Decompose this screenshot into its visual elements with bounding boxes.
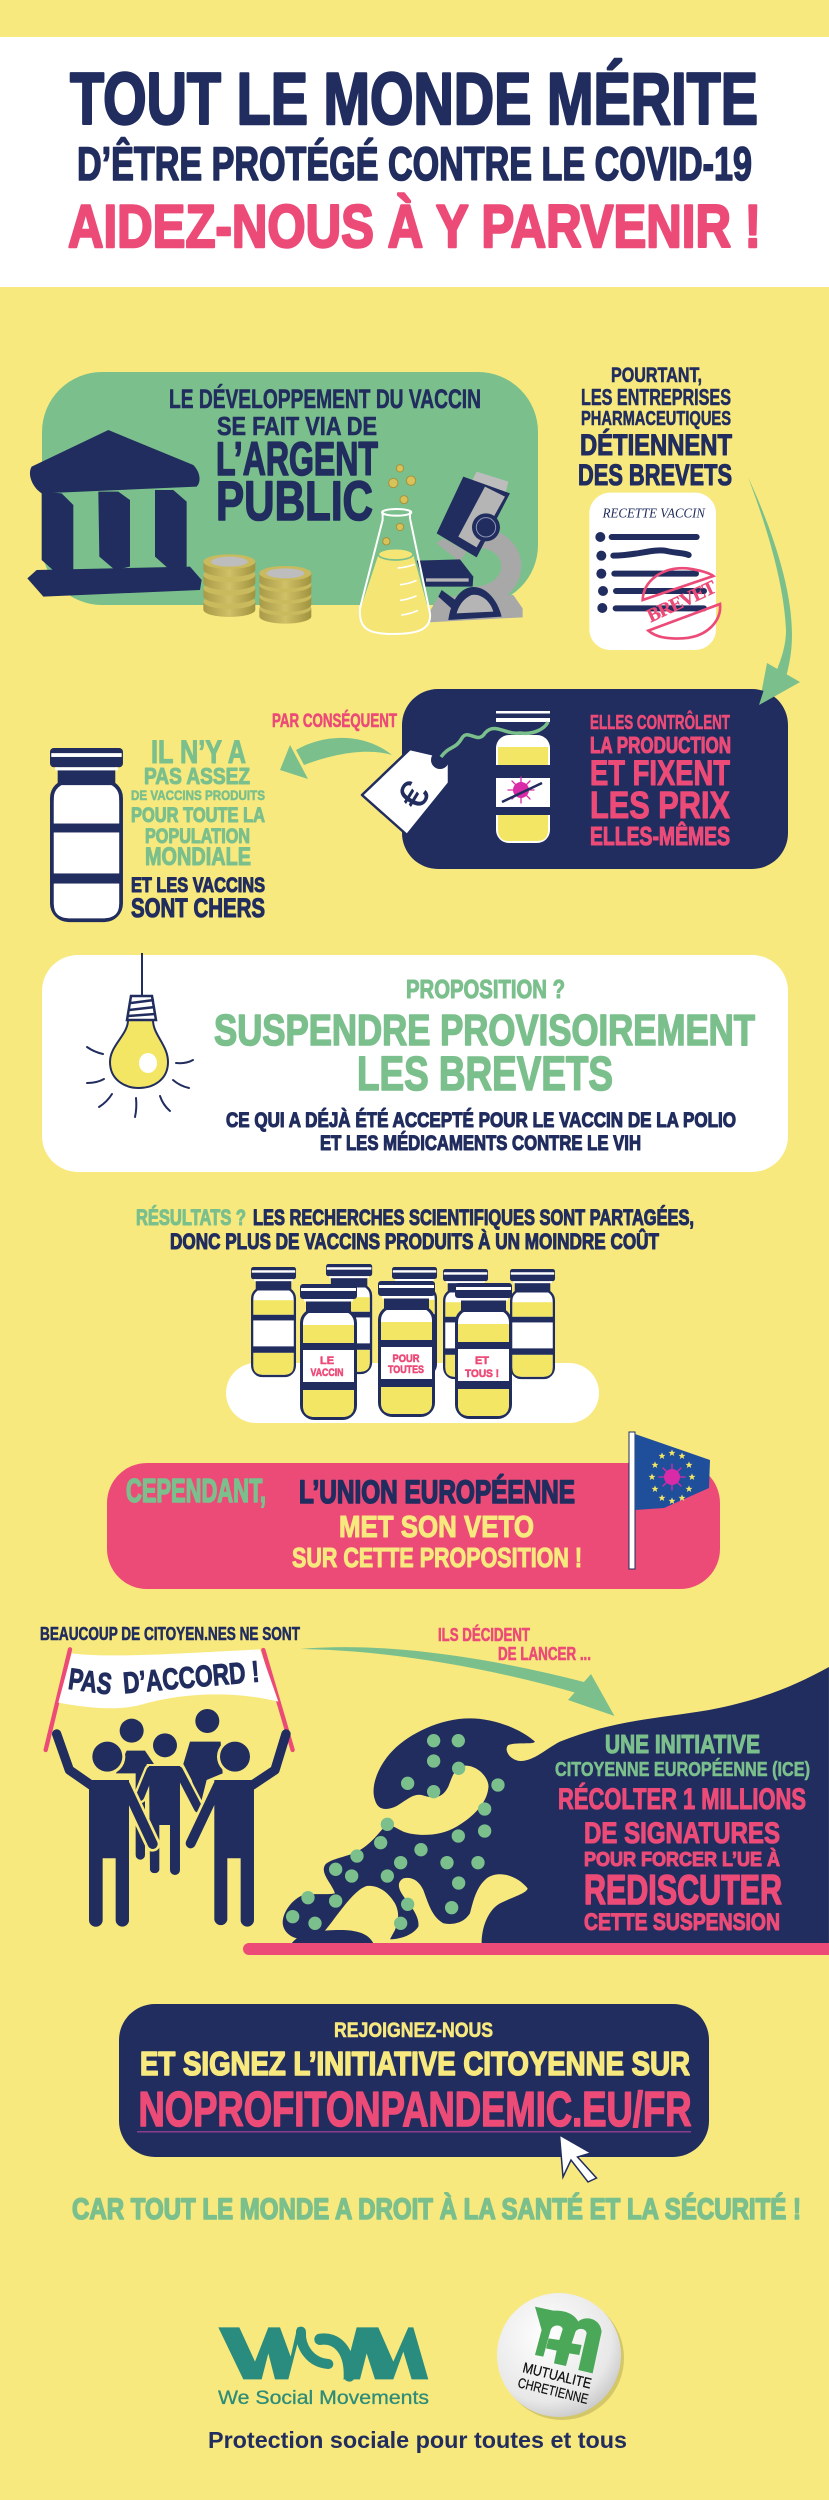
text: not enough vaccines: POUR TOUTE LA xyxy=(131,804,265,827)
text: companies hold patents: LES ENTREPRISES xyxy=(581,384,731,410)
text: they decide to launch: ILS DÉCIDENT xyxy=(438,1624,530,1645)
text: results: RÉSULTATS ? xyxy=(136,1205,246,1230)
initiative text: DE SIGNATURES xyxy=(584,1817,780,1850)
veto text: CEPENDANT, xyxy=(126,1472,266,1509)
panel: proposal xyxy=(42,953,788,1172)
text: not enough vaccines: IL N’Y A xyxy=(151,734,246,770)
icon: bank building xyxy=(27,430,202,597)
icon: mouse cursor xyxy=(560,2135,596,2182)
vial labels: TOUS ! xyxy=(465,1368,499,1380)
control text: LES PRIX xyxy=(590,785,731,827)
veto text xyxy=(126,1472,582,1573)
tagline: Protection sociale pour toutes et tous xyxy=(208,2427,627,2453)
icon: vaccine recipe card with patent stamp xyxy=(589,493,720,650)
icon: vial in panel xyxy=(496,711,550,843)
icon: EU flag xyxy=(629,1432,710,1569)
initiative text: UNE INITIATIVE xyxy=(605,1729,760,1759)
text: not enough vaccines: PAS ASSEZ xyxy=(144,763,250,789)
veto text: MET SON VETO xyxy=(339,1509,534,1544)
vial labels: VACCIN xyxy=(310,1367,344,1379)
vial labels: POUR xyxy=(392,1353,420,1365)
control text xyxy=(590,710,731,851)
icon: price tag: € xyxy=(389,775,438,817)
vial labels: LE xyxy=(320,1355,334,1367)
text: not enough vaccines: POPULATION xyxy=(145,825,250,848)
arrow: patents to control xyxy=(748,477,800,705)
text: companies hold patents: POURTANT, xyxy=(611,364,702,387)
wave dots xyxy=(286,1734,505,1930)
banner xyxy=(58,1649,278,1708)
logo: WSM xyxy=(218,2327,429,2409)
public money text: PUBLIC xyxy=(216,469,373,532)
text: results: DONC PLUS DE VACCINS PRODUITS À UN MOINDRE COÛT xyxy=(170,1229,659,1254)
public money text: LE DÉVELOPPEMENT DU VACCIN xyxy=(169,383,481,414)
back figures xyxy=(116,1709,223,1860)
vial labels: ET xyxy=(475,1355,489,1367)
text: companies hold patents xyxy=(578,364,732,492)
protesters with banner xyxy=(46,1649,293,1927)
group of vials on white pill xyxy=(226,1264,599,1423)
proposal text xyxy=(214,974,755,1155)
arrow head overlay on panel xyxy=(759,680,800,705)
proposal text: LES BREVETS xyxy=(357,1048,613,1101)
vial labels xyxy=(310,1353,499,1380)
logo: Mutualité Chrétienne button xyxy=(497,2293,624,2420)
icon: price tag xyxy=(362,722,548,835)
initiative text: POUR FORCER L’UE À xyxy=(584,1848,780,1871)
text: companies hold patents: DÉTIENNENT xyxy=(580,428,732,462)
icon: vaccine recipe card with patent stamp: BREVET xyxy=(644,577,720,627)
front right figure xyxy=(191,1734,286,1927)
logo: Mutualité Chrétienne button: CHRETIENNE xyxy=(516,2374,590,2407)
text: not enough vaccines: MONDIALE xyxy=(145,843,251,871)
title band xyxy=(0,37,829,287)
text: results: LES RECHERCHES SCIENTIFIQUES SONT PARTAGÉES, xyxy=(253,1205,694,1230)
text: citizens disagree: BEAUCOUP DE CITOYEN.NES NE SONT xyxy=(40,1623,301,1644)
panel: public money xyxy=(27,372,538,634)
vial labels: TOUTES xyxy=(388,1364,424,1376)
veto text: L’UNION EUROPÉENNE xyxy=(299,1474,575,1510)
text: companies hold patents: PHARMACEUTIQUES xyxy=(581,408,731,430)
text: companies hold patents: DES BREVETS xyxy=(578,459,732,492)
initiative text: CETTE SUSPENSION xyxy=(584,1909,780,1936)
text: they decide to launch xyxy=(438,1624,591,1664)
public money text: L’ARGENT xyxy=(216,432,378,485)
panel: call to action xyxy=(119,2004,709,2157)
proposal text: ET LES MÉDICAMENTS CONTRE LE VIH xyxy=(320,1132,641,1155)
label: par conséquent: PAR CONSÉQUENT xyxy=(272,710,397,732)
centre figure xyxy=(140,1733,198,1875)
text: they decide to launch: DE LANCER ... xyxy=(498,1644,591,1664)
panel: EU veto xyxy=(107,1432,720,1589)
wave illustration xyxy=(243,1667,829,1955)
icon: large empty vial xyxy=(50,748,123,920)
wave body xyxy=(283,1667,829,1943)
text: results xyxy=(136,1205,694,1254)
text: not enough vaccines xyxy=(131,734,265,923)
text: not enough vaccines: ET LES VACCINS xyxy=(131,874,265,897)
initiative text xyxy=(555,1729,810,1936)
arrow: consequence to shortage xyxy=(280,738,392,779)
control text: LA PRODUCTION xyxy=(590,732,731,758)
text: not enough vaccines: SONT CHERS xyxy=(131,893,265,923)
panel: call to action: ET SIGNEZ L’INITIATIVE CITOYENNE SUR xyxy=(140,2045,690,2082)
control text: ET FIXENT xyxy=(590,754,730,793)
banner: D’ACCORD ! xyxy=(122,1656,261,1700)
icon: coins xyxy=(203,554,311,624)
control text: ELLES CONTRÔLENT xyxy=(590,710,730,734)
public money text xyxy=(169,383,481,532)
icon: flask with coins xyxy=(360,465,430,634)
veto text: SUR CETTE PROPOSITION ! xyxy=(292,1542,582,1573)
public money text: SE FAIT VIA DE xyxy=(217,411,377,441)
proposal text: PROPOSITION ? xyxy=(406,974,565,1004)
logo: WSM: We Social Movements xyxy=(218,2388,429,2409)
logo: Mutualité Chrétienne button: MUTUALITE xyxy=(521,2360,593,2393)
icon: microscope xyxy=(417,472,523,623)
icon: light bulb xyxy=(87,953,193,1117)
banner: PAS xyxy=(66,1663,114,1702)
panel: companies control production xyxy=(362,680,800,869)
icon: vaccine recipe card with patent stamp: RECETTE VACCIN xyxy=(602,506,706,521)
front left figure xyxy=(57,1734,153,1927)
text: not enough vaccines: DE VACCINS PRODUITS xyxy=(131,787,265,803)
banner poles xyxy=(46,1649,293,1750)
panel: call to action: REJOIGNEZ-NOUS xyxy=(334,2019,493,2042)
arrow: citizens to initiative xyxy=(300,1647,614,1716)
control text: ELLES-MÊMES xyxy=(590,821,730,851)
ground bar xyxy=(243,1943,829,1955)
